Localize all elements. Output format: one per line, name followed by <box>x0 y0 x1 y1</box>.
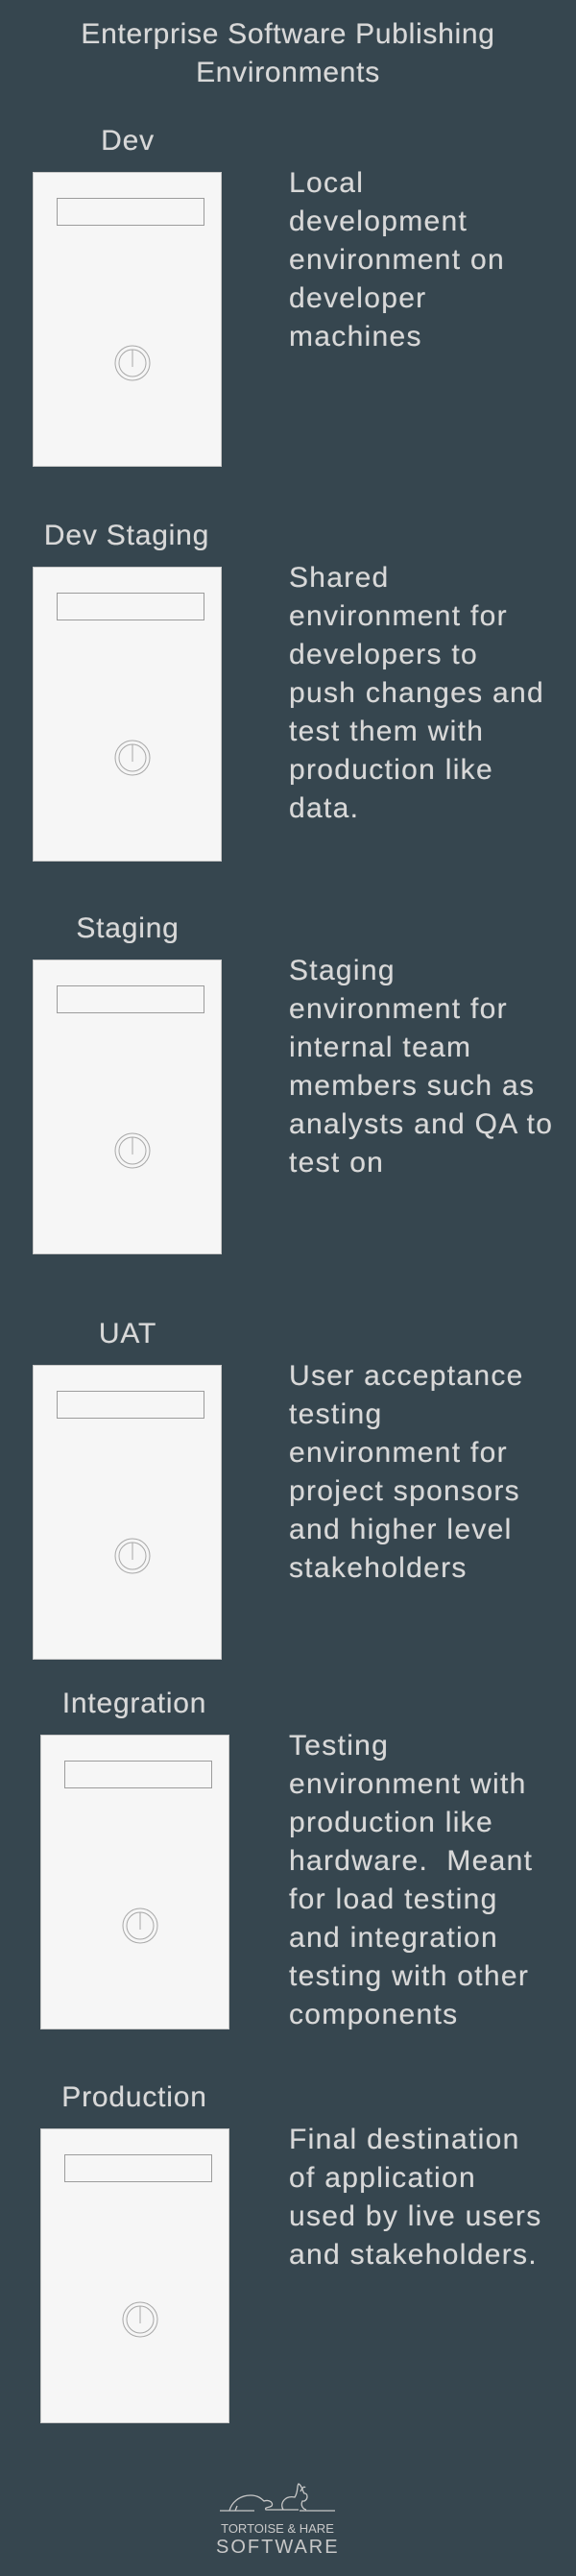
text: dev description: Local <box>289 167 364 198</box>
icon: server production <box>40 2128 229 2423</box>
label: staging: Staging <box>76 912 180 944</box>
text: dev staging description <box>289 561 544 824</box>
panel: dev staging <box>33 520 544 862</box>
panel: uat <box>33 1318 524 1660</box>
text: production description <box>289 2123 542 2271</box>
icon: server uat <box>33 1365 222 1660</box>
title: Environments <box>196 57 380 88</box>
text: dev description <box>289 167 505 352</box>
icon: server integration <box>40 1735 229 2029</box>
text: dev staging description: Shared <box>289 561 390 594</box>
text: uat description <box>289 1360 524 1583</box>
text: software: SOFTWARE <box>216 2537 340 2558</box>
text: staging description: environment for <box>289 993 508 1024</box>
text: dev description: environment on <box>289 244 505 275</box>
panel: dev <box>33 125 505 467</box>
text: staging description <box>289 955 553 1178</box>
text: integration description <box>289 1729 533 2030</box>
title <box>81 18 495 88</box>
text: uat description: and higher level <box>289 1514 513 1544</box>
text: dev staging description: data. <box>289 791 359 824</box>
text: staging description: analysts and QA to <box>289 1108 553 1139</box>
text: dev description: machines <box>289 321 422 352</box>
text: staging description: Staging <box>289 955 396 985</box>
text: uat description: project sponsors <box>289 1475 520 1506</box>
text: dev staging description: developers to <box>289 638 478 670</box>
text: staging description: members such as <box>289 1070 535 1101</box>
text: dev staging description: push changes and <box>289 676 544 709</box>
label: production: Production <box>61 2081 207 2113</box>
text: uat description: stakeholders <box>289 1552 468 1583</box>
icon: server dev <box>33 172 222 467</box>
label: dev: Dev <box>101 125 155 157</box>
text: integration description: Testing <box>289 1729 389 1762</box>
panel: staging <box>33 912 553 1254</box>
text: integration description: hardware. Meant <box>289 1844 533 1877</box>
icon: tortoise and hare line art <box>220 2483 335 2512</box>
title: Enterprise Software Publishing <box>81 18 495 50</box>
text: integration description: production like <box>289 1806 493 1838</box>
text: integration description: and integration <box>289 1921 498 1954</box>
text: tortoise & hare: TORTOISE & HARE <box>221 2521 334 2536</box>
icon: server staging <box>33 960 222 1254</box>
icon: server dev staging <box>33 567 222 862</box>
panel: production <box>40 2081 542 2423</box>
text: integration description: testing with other <box>289 1959 529 1992</box>
text: dev description: development <box>289 206 468 236</box>
text: production description: Final destination <box>289 2123 520 2155</box>
label: dev staging: Dev Staging <box>44 520 209 551</box>
panel: integration <box>40 1688 533 2030</box>
text: integration description: for load testing <box>289 1883 498 1915</box>
text: production description: and stakeholders. <box>289 2238 538 2271</box>
logo: tortoise & hare software <box>216 2483 340 2558</box>
text: production description: of application <box>289 2161 476 2194</box>
text: integration description: components <box>289 1998 458 2030</box>
label: uat: UAT <box>99 1318 156 1349</box>
text: uat description: testing <box>289 1398 382 1429</box>
text: dev staging description: test them with <box>289 715 484 747</box>
text: dev staging description: production like <box>289 753 493 786</box>
text: dev description: developer <box>289 282 426 313</box>
label: integration: Integration <box>62 1688 206 1719</box>
text: production description: used by live users <box>289 2199 542 2232</box>
text: dev staging description: environment for <box>289 599 508 632</box>
text: staging description: internal team <box>289 1032 471 1062</box>
text: staging description: test on <box>289 1147 384 1178</box>
text: integration description: environment with <box>289 1767 527 1800</box>
text: uat description: User acceptance <box>289 1360 524 1391</box>
text: uat description: environment for <box>289 1437 508 1468</box>
